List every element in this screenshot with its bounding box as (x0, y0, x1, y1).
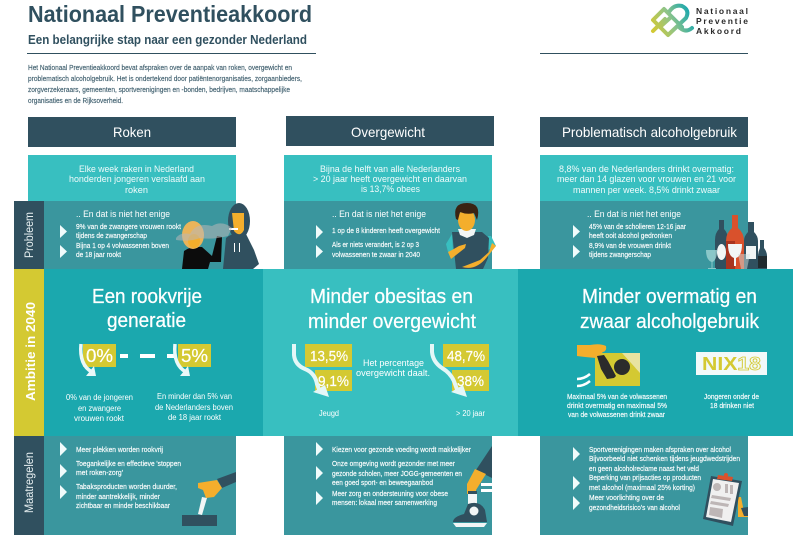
intro box: overgewicht (284, 155, 492, 201)
intro text: organisaties en de Rijksoverheid. (28, 96, 123, 105)
panel: maatregelen alcohol: Meer voorlichting over de (589, 493, 664, 502)
panel: maatregelen overgewicht: Meer zorg en ondersteuning voor obese (332, 489, 448, 498)
icon: NIX18: NIX 18 (702, 354, 761, 374)
panel: probleem overgewicht: Als er niets verandert, is 2 op 3 (332, 240, 419, 249)
intro box: alcohol (540, 155, 748, 201)
panel: maatregelen alcohol: Bijvoorbeeld niet schenken tijdens jeugdwedstrijden (589, 454, 740, 463)
column header: Problematisch alcoholgebruik (540, 117, 748, 147)
icon: smokers (176, 203, 259, 269)
caption right: 18 drinken niet (710, 401, 755, 410)
heading: minder overgewicht (308, 310, 476, 333)
icon: refused drink (577, 344, 640, 386)
logo wordmark (696, 6, 748, 36)
panel: maatregelen alcohol: met alcohol (maximaal 25% korting) (589, 483, 695, 492)
caption left (66, 393, 133, 423)
caption left (567, 392, 667, 419)
intro box: overgewicht: is 13,7% obees (361, 184, 420, 195)
intro box: roken: roken (125, 185, 148, 196)
panel: maatregelen overgewicht: Kiezen voor gezonde voeding wordt makkelijker (332, 445, 471, 454)
caption right (704, 392, 759, 410)
stat: jeugd: 13,5% (310, 348, 348, 365)
panel: probleem overgewicht (284, 201, 496, 269)
header (27, 1, 748, 54)
column header: Problematisch alcoholgebruik: Problematisch alcoholgebruik (562, 124, 738, 140)
panel: maatregelen roken: Tabaksproducten worden duurder, (76, 482, 177, 491)
panel: probleem roken: tijdens de zwangerschap (76, 231, 147, 240)
panel: probleem roken: 9% van de zwangere vrouwen rookt (76, 222, 182, 231)
bullet arrows (316, 225, 323, 258)
stat: 5% (175, 344, 211, 376)
row label: Ambitie in 2040: Ambitie in 2040 (23, 302, 38, 401)
row label: Maatregelen: Maatregelen (24, 452, 36, 513)
intro box: alcohol: meer dan 14 glazen voor vrouwen en 21 voor (557, 174, 736, 185)
icon: heart logo (653, 6, 692, 35)
stat: jeugd (294, 344, 352, 397)
row label: Ambitie in 2040 (14, 269, 44, 436)
icon: clipboard (703, 473, 748, 526)
dashes (120, 354, 175, 358)
label: 20 jaar: > 20 jaar (456, 409, 485, 418)
panel: maatregelen alcohol: Beperking van prijsacties op producten (589, 473, 701, 482)
panel: probleem alcohol: 8,9% van de vrouwen drinkt (589, 241, 672, 250)
panel: maatregelen alcohol: Sportverenigingen maken afspraken over alcohol (589, 445, 731, 454)
heading (92, 285, 202, 332)
heading: Minder obesitas en (310, 285, 473, 308)
intro box: alcohol: mannen per week. 8,5% drinkt zwaar (573, 185, 720, 196)
title: Nationaal Preventieakkoord (28, 1, 312, 27)
caption center (356, 358, 430, 378)
row label: Maatregelen (14, 436, 44, 535)
panel: maatregelen overgewicht: Onze omgeving wordt gezonder met meer (332, 459, 455, 468)
panel: maatregelen roken: met roken-zorg' (76, 468, 124, 477)
intro box: alcohol: 8,8% van de Nederlanders drinkt overmatig: (559, 164, 734, 175)
caption right: En minder dan 5% van (157, 392, 232, 401)
bullet arrows (60, 225, 67, 258)
intro text: problematisch alcoholgebruik. Het is ondertekend door patiëntenorganisaties, zorgaanbieders, (28, 74, 302, 83)
logo (653, 6, 748, 36)
bullet arrows (573, 225, 580, 258)
panel: probleem roken: de 18 jaar rookt (76, 250, 122, 259)
panel: ambitie roken (44, 269, 263, 436)
stat: 5%: 5% (181, 346, 208, 366)
intro box: roken (28, 155, 236, 201)
panel: probleem alcohol (540, 201, 767, 269)
panel: probleem roken (44, 201, 259, 269)
caption left: vrouwen rookt (74, 414, 125, 423)
panel: probleem alcohol: 45% van de scholieren 12-16 jaar (589, 222, 686, 231)
intro box: overgewicht: Bijna de helft van alle Nederlanders (320, 164, 460, 175)
heading: Minder overmatig en (582, 285, 757, 308)
heading (580, 285, 760, 333)
panel: maatregelen roken: minder aantrekkelijk, minder (76, 492, 160, 501)
panel: ambitie overgewicht (263, 269, 518, 436)
label: jeugd: Jeugd (319, 409, 339, 418)
logo wordmark: Nationaal (696, 6, 748, 16)
panel: maatregelen overgewicht: een goed sport- en beweegaanbod (332, 478, 433, 487)
icon: NIX18 (696, 352, 767, 375)
stat: jeugd: 9,1% (318, 373, 349, 390)
stat: volwassenen (432, 344, 489, 397)
row label: Probleem: Probleem (24, 212, 36, 258)
panel: maatregelen alcohol (540, 436, 748, 535)
panel: maatregelen overgewicht (284, 436, 492, 535)
heading (308, 285, 476, 333)
panel: probleem alcohol: .. En dat is niet het enige (587, 209, 681, 219)
caption center: overgewicht daalt. (356, 368, 430, 378)
intro text (28, 63, 302, 105)
panel: maatregelen overgewicht: mensen: lokaal meer samenwerking (332, 498, 437, 507)
panel: probleem roken: .. En dat is niet het enige (76, 209, 170, 219)
icon: bottles (706, 215, 767, 269)
logo wordmark: Preventie (696, 16, 748, 26)
caption left: en zwangere (78, 404, 122, 413)
caption right (155, 392, 233, 422)
intro box: roken: Elke week raken in Nederland (79, 164, 194, 175)
icon: cigarette in ashtray (182, 472, 236, 526)
caption center: Het percentage (363, 358, 424, 368)
caption left: 0% van de jongeren (66, 393, 133, 402)
stat: 0% (81, 344, 116, 376)
heading: generatie (107, 309, 186, 332)
icon: running leg (453, 446, 492, 527)
caption right: Jongeren onder de (704, 392, 759, 401)
caption left: Maximaal 5% van de volwassenen (567, 392, 667, 401)
panel: probleem alcohol: heeft ooit alcohol gedronken (589, 231, 672, 240)
caption right: de 18 jaar rookt (168, 413, 222, 422)
subtitle: Een belangrijke stap naar een gezonder Nederland (28, 32, 307, 47)
icon: man with belly (446, 203, 496, 269)
panel: probleem roken: Bijna 1 op 4 volwassenen boven (76, 241, 169, 250)
intro text: zorgverzekeraars, gemeenten, sportverenigingen en -bonden, bedrijven, maatschappelijke (28, 85, 290, 94)
panel: maatregelen roken: Toegankelijke en effectieve 'stoppen (76, 459, 181, 468)
panel: maatregelen alcohol: gezondheidsrisico's van alcohol (589, 503, 680, 512)
heading: zwaar alcoholgebruik (580, 310, 760, 333)
heading: Een rookvrije (92, 285, 202, 308)
panel: maatregelen roken: zichtbaar en minder beschikbaar (76, 501, 170, 510)
panel: maatregelen alcohol: en geen alcoholreclame naast het veld (589, 464, 699, 473)
logo wordmark: Akkoord (696, 26, 741, 36)
bullet arrows (573, 447, 580, 510)
row label: Probleem (14, 201, 44, 269)
caption left: van de volwassenen drinkt zwaar (568, 410, 665, 419)
panel: maatregelen overgewicht: gezonde scholen, meer JOGG-gemeenten en (332, 469, 462, 478)
column header: Overgewicht (286, 116, 494, 146)
panel: ambitie alcohol (518, 269, 793, 436)
panel: maatregelen roken: Meer plekken worden rookvrij (76, 445, 163, 454)
intro box: overgewicht: > 20 jaar heeft overgewicht en daarvan (313, 174, 467, 185)
column header: Overgewicht: Overgewicht (351, 124, 425, 140)
column header: Roken: Roken (113, 124, 151, 140)
stat: volwassenen: 48,7% (447, 348, 485, 365)
caption left: drinkt overmatig en maximaal 5% (567, 401, 667, 410)
panel: probleem overgewicht: volwassenen te zwaar in 2040 (332, 250, 420, 259)
stat: 0%: 0% (86, 346, 113, 366)
caption right: de Nederlanders boven (155, 403, 233, 412)
panel: probleem alcohol: tijdens zwangerschap (589, 250, 651, 259)
bullet arrows (60, 442, 67, 499)
column header: Roken (28, 117, 236, 147)
intro box: roken: honderden jongeren verslaafd aan (69, 174, 205, 185)
bullet arrows (316, 442, 323, 505)
panel: maatregelen roken (44, 436, 236, 535)
intro text: Het Nationaal Preventieakkoord bevat afspraken over de aanpak van roken, overgewicht en (28, 63, 292, 72)
panel: probleem overgewicht: 1 op de 8 kinderen heeft overgewicht (332, 226, 441, 235)
stat: volwassenen: 38% (457, 373, 484, 390)
panel: probleem overgewicht: .. En dat is niet het enige (332, 209, 426, 219)
